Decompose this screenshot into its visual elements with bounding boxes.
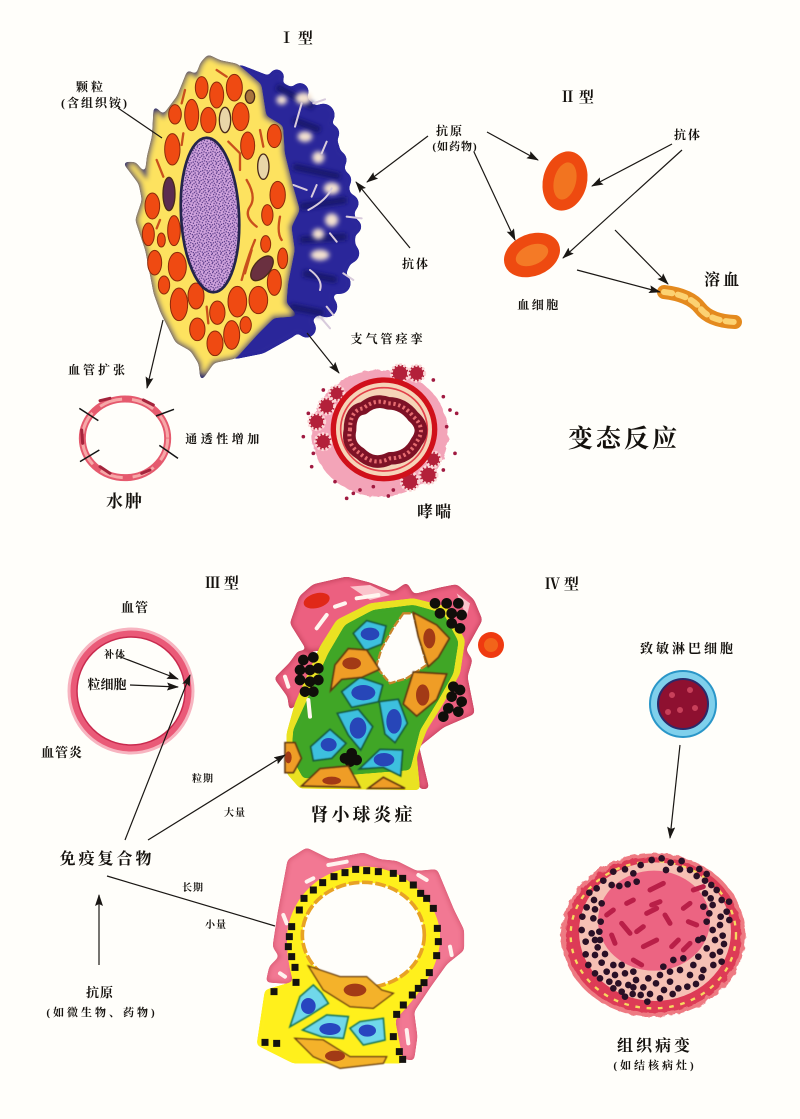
type I heading: Ⅰ 型	[279, 29, 313, 47]
blue folds	[277, 87, 347, 313]
epithelioid cell nuclei	[607, 883, 703, 965]
granuloma outer layer	[563, 855, 743, 1015]
tissue lesion label: 组织病变	[617, 1036, 693, 1055]
tuberculosis note: (如结核病灶)	[613, 1058, 697, 1072]
lymphocyte label: 致敏淋巴细胞	[640, 641, 736, 656]
type II red cell one	[536, 147, 594, 215]
arrow to vasodilation	[147, 320, 163, 388]
arrow to bronchospasm	[307, 333, 339, 373]
microbe note: (如微生物、药物)	[46, 1005, 158, 1019]
golgi membranes	[157, 70, 282, 323]
antibody label right: 抗体	[674, 127, 702, 142]
glomerulonephritis tissue	[275, 577, 482, 790]
orange endothelial cells	[285, 613, 449, 788]
pink outer cells	[275, 577, 482, 788]
yellow matrix	[257, 867, 440, 1063]
immune deposits	[265, 869, 438, 1059]
vessel label: 血管	[121, 600, 149, 615]
type III heading: Ⅲ 型	[205, 574, 239, 592]
permeability arrows	[79, 408, 178, 462]
orange cell nuclei	[285, 628, 435, 785]
endothelial cell lower	[295, 1038, 387, 1068]
antibody arrow to red cell one	[592, 144, 672, 186]
glands	[309, 365, 441, 490]
main title: 变态反应	[568, 424, 680, 453]
blood cell label: 血细胞	[517, 297, 561, 312]
immune deposits	[300, 603, 462, 762]
vasodilation label: 血管扩张	[68, 362, 128, 377]
capillary lumen	[376, 613, 427, 683]
bronchus illustration	[303, 365, 457, 498]
complement arrow	[118, 656, 178, 679]
scattered tissue specks	[303, 380, 457, 498]
bronchus muscle ring	[333, 380, 435, 479]
edema vessel	[79, 398, 178, 478]
antigen arrow to red cell one	[487, 132, 538, 160]
antigen label: 抗原	[436, 123, 464, 138]
lymphocyte dots	[582, 858, 729, 1002]
glomerulonephritis label: 肾小球炎症	[310, 804, 416, 825]
granules	[142, 74, 288, 356]
large amount label: 大量	[224, 806, 246, 819]
permeability label: 通透性增加	[185, 431, 263, 446]
small amount label: 小量	[205, 918, 227, 931]
pale pink patches	[350, 585, 470, 617]
wall pale cell bodies	[82, 399, 168, 478]
cell yellow cytoplasm	[125, 56, 298, 378]
antigen arrow to red cell two	[474, 152, 515, 240]
antibody label left: 抗体	[402, 256, 430, 271]
hemolysis label: 溶血	[704, 271, 742, 289]
granulocyte arrow	[130, 685, 178, 687]
bronchospasm label: 支气管痉挛	[350, 331, 426, 346]
epithelioid core	[598, 871, 710, 971]
cell surface highlights	[276, 92, 340, 260]
edema label: 水肿	[106, 492, 144, 511]
complement label: 补体	[104, 648, 126, 661]
endothelial cell upper	[308, 966, 393, 1008]
cell blue back	[227, 63, 361, 359]
epithelium and lumen	[349, 402, 421, 462]
lymphocyte arrow to lesion	[670, 745, 680, 838]
histamine note: (含组织铵)	[61, 95, 129, 110]
endothelial nuclei	[325, 984, 366, 1061]
blue cell nuclei	[301, 998, 376, 1037]
blue nuclei	[321, 628, 402, 766]
immune complex line to lesion	[107, 876, 275, 926]
inner ring	[341, 388, 427, 471]
pink outer layer	[267, 848, 463, 1060]
asthma label: 哮喘	[417, 502, 453, 521]
drug note: (如药物)	[432, 139, 478, 153]
granuloma inner zone	[579, 862, 731, 1001]
antibody arrow to red cell two	[563, 150, 682, 258]
outer yellow streaks	[571, 862, 736, 1008]
loose red cell	[478, 632, 504, 658]
blue mesangial cells	[311, 621, 407, 776]
sensitized lymphocyte	[650, 671, 716, 737]
type II heading: Ⅱ 型	[560, 88, 594, 106]
blue cells	[290, 985, 385, 1045]
arrows	[99, 108, 682, 965]
mast cell illustration	[125, 56, 362, 378]
vasculitis vessel	[69, 629, 193, 753]
antibody arrow to mast cell	[356, 182, 410, 248]
vessel lumen	[302, 882, 424, 988]
cell surface processes	[293, 99, 362, 328]
nucleus	[177, 136, 243, 294]
immune complex arrow to glomerulus	[148, 755, 285, 840]
vasculitis label: 血管炎	[41, 745, 83, 760]
granulocyte label: 粒细胞	[87, 677, 127, 692]
chronic vessel lesion	[257, 848, 463, 1068]
mitochondria	[163, 90, 278, 285]
antigen label lower: 抗原	[86, 985, 114, 1000]
pink vacuoles	[302, 590, 331, 611]
green matrix	[287, 598, 465, 790]
antigen arrow to mast cell	[367, 136, 428, 182]
type II red cell two	[497, 225, 567, 285]
wall nuclei	[82, 398, 153, 473]
vessel wall	[82, 399, 168, 478]
type IV heading: Ⅳ 型	[545, 575, 579, 593]
arrow to hemolysis upper	[615, 230, 668, 284]
period label: 粒期	[192, 772, 214, 785]
bronchus outer tissue	[312, 370, 448, 497]
immune complex arrow to vessel	[125, 675, 190, 840]
long term label: 长期	[182, 881, 204, 894]
hemolysis fragments	[664, 292, 735, 322]
pale vacuoles	[280, 862, 452, 1043]
immune complex label: 免疫复合物	[59, 849, 155, 868]
granule label: 颗粒	[76, 79, 106, 94]
granule leader line	[118, 108, 162, 138]
antigen arrow to immune complex	[98, 895, 100, 965]
tissue lesion granuloma	[563, 855, 743, 1015]
arrow to hemolysis lower	[577, 270, 660, 292]
